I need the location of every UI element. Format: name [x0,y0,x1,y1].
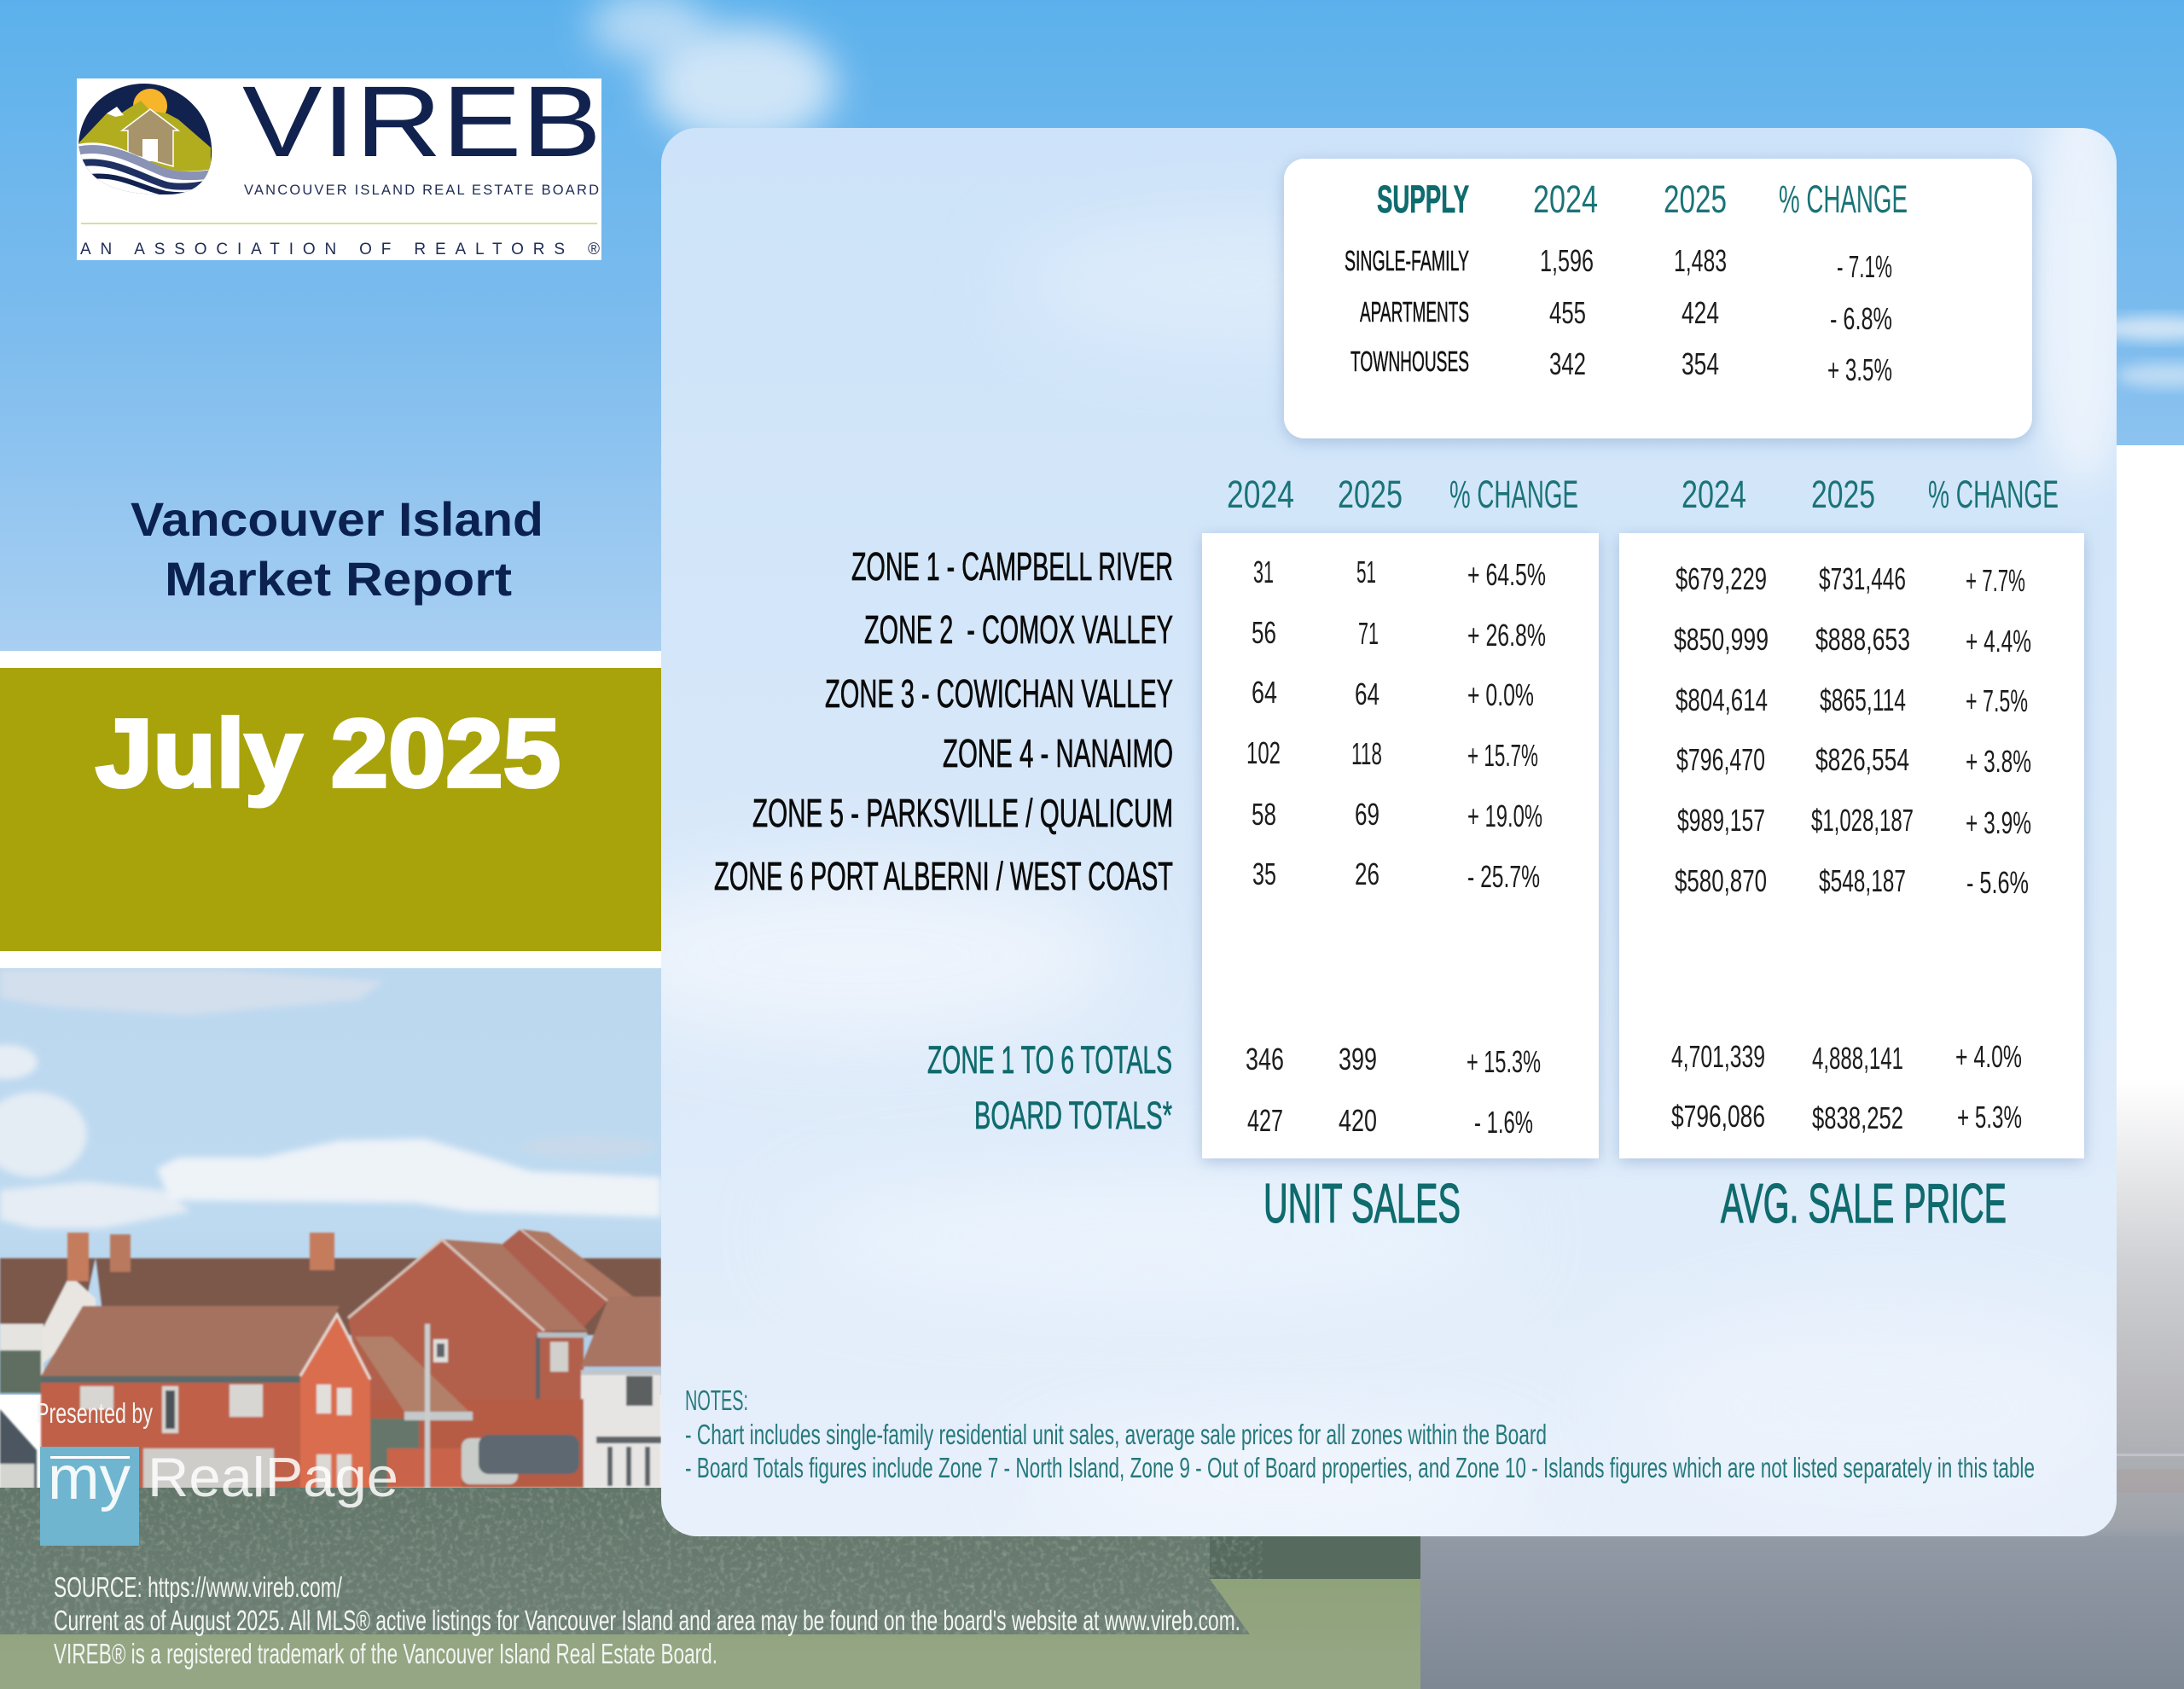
sales row: zone 3: 64 [1252,675,1277,710]
price row: zone 6: - 5.6% [1966,865,2029,900]
average price column headings [1682,473,2059,516]
rear gable [501,1229,607,1327]
notes: NOTES: [685,1384,748,1416]
left column white band with olive date block [0,651,661,968]
supply row: apartments: - 6.8% [1830,301,1892,336]
sales row: zones 1 to 6 totals [1246,1042,1541,1079]
sales row: zone 6: 26 [1355,856,1380,891]
price row: zone 2: $888,653 [1815,622,1910,657]
price row: zone 1: $679,229 [1676,561,1767,596]
sales row: board totals: 427 [1247,1103,1283,1138]
report title: Vancouver Island [131,492,543,546]
sales row: board totals [1247,1103,1533,1140]
sales row: zone 4: 102 [1246,735,1281,770]
totals labels: ZONE 1 TO 6 TOTALS [927,1038,1172,1082]
sales row: zone 4: 118 [1351,736,1382,771]
sales row: zone 4 [1246,735,1538,773]
zone labels: ZONE 1 - CAMPBELL RIVER [851,544,1173,589]
notes: - Chart includes single-family residential unit sales, average sale prices for all zones within the Board [685,1419,1547,1450]
supply row: apartments [1360,295,1892,336]
price row: zone 5: $1,028,187 [1811,803,1914,838]
price row: zones 1 to 6 totals [1671,1039,2022,1076]
panel: average sale price table [1619,533,2084,1158]
price row: zone 5: + 3.9% [1966,805,2031,840]
price row: board totals [1671,1099,2022,1135]
background: blue sky [0,0,2184,665]
supply header row [1377,177,1908,221]
zone labels: ZONE 4 - NANAIMO [943,731,1173,775]
panel: unit sales table [1202,533,1599,1158]
average price column headings: 2025 [1811,473,1875,516]
price row: zone 5: $989,157 [1677,803,1765,838]
panel: supply card [1284,159,2032,438]
sales row: zone 2: + 26.8% [1467,618,1546,653]
sales row: zone 1 [1253,554,1546,592]
panel: market data [580,77,2133,1536]
zone labels: ZONE 5 - PARKSVILLE / QUALICUM [752,791,1173,835]
heading: average sale price: AVG. SALE PRICE [1721,1172,2007,1234]
sales row: zone 3: 64 [1355,676,1380,711]
price row: zone 3: + 7.5% [1966,683,2028,718]
sales row: zone 2 [1252,615,1546,653]
sales row: zone 3: + 0.0% [1467,677,1534,712]
supply header row: SUPPLY [1377,177,1469,221]
supply header row: 2025 [1664,177,1727,221]
supply row: single-family [1345,243,1892,284]
source footer: VIREB® is a registered trademark of the Vancouver Island Real Estate Board. [54,1638,717,1669]
side roof and walls [417,1397,585,1488]
price row: zone 4: $826,554 [1815,742,1909,777]
logo: VIREB: VIREB [242,66,601,178]
supply row: apartments: 455 [1549,295,1586,330]
supply row: single-family: 1,483 [1674,243,1727,278]
totals labels: BOARD TOTALS* [974,1094,1172,1137]
supply row: townhouses: TOWNHOUSES [1350,345,1469,377]
parked cars [462,1438,518,1484]
source footer [54,1571,1240,1669]
supply row: townhouses: 354 [1682,346,1719,381]
report title [131,492,543,606]
left neighbour [0,1409,37,1490]
presented by myRealPage: my [48,1444,131,1512]
price row: board totals: $838,252 [1812,1100,1903,1135]
average price column headings: % CHANGE [1928,473,2059,516]
logo: VIREB: VANCOUVER ISLAND REAL ESTATE BOARD [244,183,599,198]
price row: zone 1: + 7.7% [1966,563,2025,598]
sales row: board totals: - 1.6% [1474,1105,1533,1140]
logo: VIREB: AN ASSOCIATION OF REALTORS ® [80,241,600,258]
rear terrace roof [0,1258,661,1335]
source footer: Current as of August 2025. All MLS® active listings for Vancouver Island and area may be found on the board's website at www.vireb.com. [54,1605,1240,1636]
chimneys [67,1233,89,1281]
price row: zone 1: $731,446 [1819,561,1906,596]
unit sales column headings [1227,473,1578,516]
price row: zone 5 [1677,803,2031,840]
sales row: zone 5: + 19.0% [1467,798,1542,833]
presented by myRealPage [36,1397,398,1546]
price row: zone 2 [1674,622,2031,659]
presented by myRealPage: Presented by [36,1397,153,1429]
presented by myRealPage: RealPage [148,1446,398,1508]
sales row: zone 4: + 15.7% [1467,738,1538,773]
zone labels: ZONE 3 - COWICHAN VALLEY [825,671,1173,716]
price row: zones 1 to 6 totals: 4,888,141 [1812,1041,1903,1076]
sales row: zones 1 to 6 totals: 346 [1246,1042,1284,1077]
price row: zones 1 to 6 totals: 4,701,339 [1671,1039,1765,1074]
price row: zone 6: $548,187 [1819,863,1906,898]
sales row: zone 6: 35 [1252,856,1276,891]
supply row: townhouses [1350,345,1892,387]
hedge [0,1488,1250,1634]
lamp post [425,1324,430,1488]
heading: unit sales: UNIT SALES [1263,1172,1461,1234]
supply header row: % CHANGE [1779,177,1908,221]
report title: Market Report [165,552,512,606]
sales row: board totals: 420 [1339,1103,1377,1138]
unit sales column headings: 2025 [1338,473,1403,516]
sales row: zone 5: 69 [1355,797,1380,832]
sales row: zone 6 [1252,856,1540,894]
sales row: zones 1 to 6 totals: + 15.3% [1467,1044,1541,1079]
unit sales column headings: 2024 [1227,473,1294,516]
sales row: zone 3 [1252,675,1534,712]
price row: zone 6 [1675,863,2029,900]
sales row: zone 1: 51 [1356,554,1376,589]
notes [685,1384,2035,1483]
clouds [0,970,661,1228]
supply row: single-family: SINGLE-FAMILY [1345,245,1469,276]
price row: zone 6: $580,870 [1675,863,1767,898]
zone labels [714,544,1173,898]
zone labels: ZONE 6 PORT ALBERNI / WEST COAST [714,854,1173,898]
totals labels [927,1038,1172,1137]
sales row: zone 1: + 64.5% [1467,557,1546,592]
supply row: single-family: 1,596 [1540,243,1594,278]
supply row: apartments: 424 [1682,295,1719,330]
sales row: zones 1 to 6 totals: 399 [1339,1042,1377,1077]
logo: VIREB [75,66,601,260]
unit sales column headings: % CHANGE [1449,473,1578,516]
lawn [0,1570,1420,1689]
background photo: houses, hedge and lawn [0,968,1420,1689]
icon: VIREB house, hills and waves [75,82,215,196]
price row: board totals: $796,086 [1671,1099,1765,1134]
price row: zone 4 [1676,742,2031,779]
price row: zone 3 [1676,682,2028,718]
price row: zone 3: $804,614 [1676,682,1768,717]
date heading: July 2025 [96,699,561,807]
big gable house [348,1240,585,1401]
average price column headings: 2024 [1682,473,1746,516]
price row: zone 4: + 3.8% [1966,744,2031,779]
sales row: zone 5 [1252,797,1542,833]
white house [581,1370,661,1488]
supply row: townhouses: + 3.5% [1827,352,1892,387]
supply row: townhouses: 342 [1549,346,1586,381]
sales row: zone 6: - 25.7% [1467,859,1540,894]
supply row: single-family: - 7.1% [1837,249,1892,284]
price row: zone 3: $865,114 [1820,682,1906,717]
sales row: zone 1: 31 [1253,554,1274,589]
supply row: apartments: APARTMENTS [1360,296,1469,328]
zone labels: ZONE 2 - COMOX VALLEY [864,607,1173,652]
source footer: SOURCE: https://www.vireb.com/ [54,1571,343,1603]
supply header row: 2024 [1533,177,1598,221]
price row: board totals: + 5.3% [1957,1100,2022,1135]
price row: zones 1 to 6 totals: + 4.0% [1955,1039,2022,1074]
price row: zone 2: $850,999 [1674,622,1769,657]
price row: zone 4: $796,470 [1676,742,1765,777]
sales row: zone 2: 56 [1252,615,1276,650]
price row: zone 1 [1676,561,2025,598]
price row: zone 2: + 4.4% [1966,624,2031,659]
sales row: zone 5: 58 [1252,797,1276,832]
background: faded right side and lower grey field [1420,445,2184,1689]
sales row: zone 2: 71 [1358,616,1379,651]
main house [41,1306,340,1376]
